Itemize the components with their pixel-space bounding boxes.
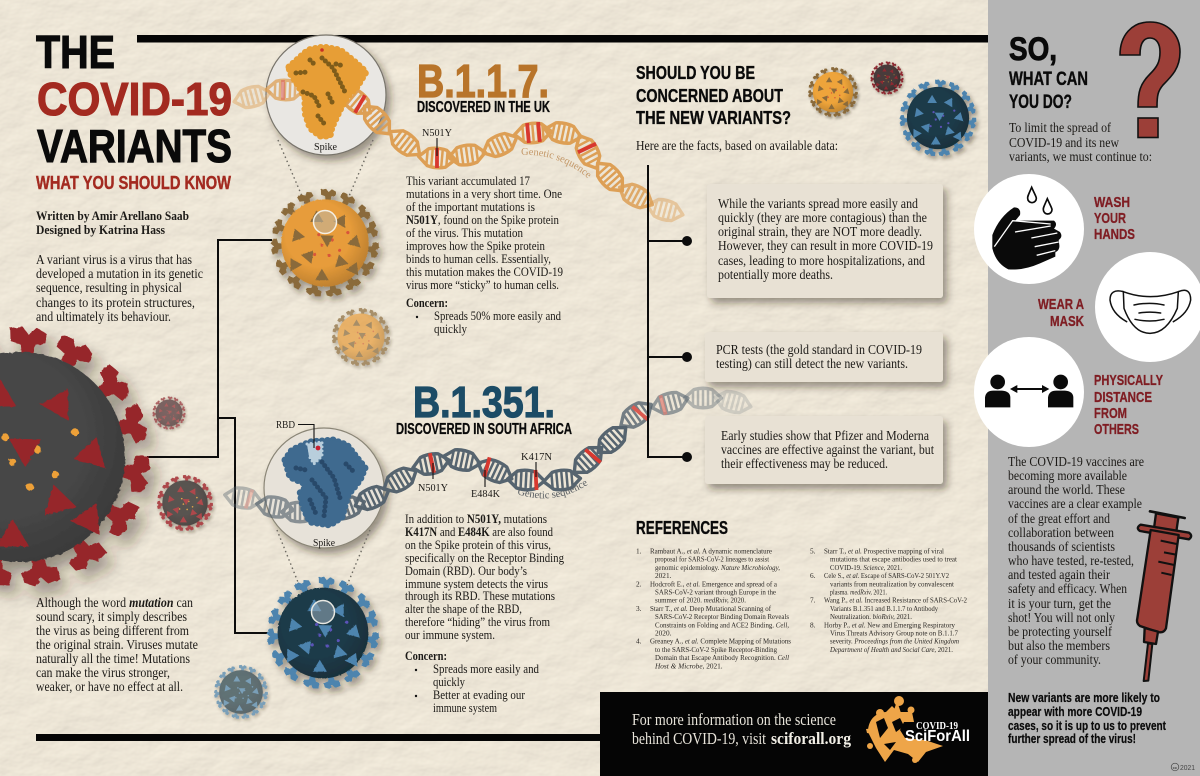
top rule [137, 35, 988, 42]
mutation labels: E484K [471, 488, 500, 500]
references: left column: 2020. [655, 628, 672, 638]
panel intro: COVID-19 and its new [1009, 135, 1119, 150]
intro text: A variant virus is a virus that has [36, 252, 192, 267]
references heading: REFERENCES [636, 518, 728, 538]
mutation labels: K417N [521, 451, 552, 463]
mutation text: the virus as being different from [36, 623, 189, 638]
N501Y marker [422, 127, 452, 156]
references: right column: 6. [810, 571, 816, 580]
intro text [36, 252, 203, 324]
intro text: developed a mutation in its genetic [36, 266, 203, 281]
B.1.351 description: Domain (RBD). Our body’s [405, 564, 527, 578]
label: spike: Spike [314, 141, 337, 153]
B.1.1.7 description: this mutation makes the COVID-19 [406, 265, 563, 279]
footer banner: For more information on the science [632, 710, 836, 729]
B.1.1.7 description: of the virus. This mutation [406, 226, 524, 240]
references: right column [810, 546, 967, 654]
genetic sequence: B.1.351 [223, 388, 753, 523]
facts intro: Here are the facts, based on available data: [636, 138, 838, 153]
references: left column: Greaney A., et al. Complete Mapping of Mutations [650, 637, 791, 646]
closing call to action: appear with more COVID-19 [1008, 705, 1142, 719]
authors: Written by Amir Arellano Saab [36, 208, 189, 223]
vaccine text: collaboration between [1008, 525, 1114, 540]
B.1.351 heading: B.1.351. [413, 378, 555, 427]
spike close-up circle: B.1.1.7 [266, 35, 386, 155]
connector lines from original virus to variants [147, 240, 272, 633]
vaccine text: shot! You will not only [1008, 610, 1115, 625]
fact card 1: cases, leading to more hospitalizations, and [718, 253, 925, 268]
vaccine text: and tested again their [1008, 567, 1110, 582]
vaccine text: around the world. These [1008, 482, 1125, 497]
SciForAll logo: COVID-19 [916, 721, 958, 732]
B.1.351 description: alter the shape of the RBD, [405, 602, 522, 616]
B.1.351 concern: immune system [433, 701, 497, 715]
panel intro: variants, we must continue to: [1009, 149, 1152, 164]
label: spike: Spike [313, 537, 335, 549]
SciForAll logo: SciForAll [905, 728, 970, 745]
label: physically distance: FROM [1094, 406, 1127, 422]
closing call to action: New variants are more likely to [1008, 691, 1160, 705]
label: physically distance: DISTANCE [1094, 390, 1152, 406]
panel intro: To limit the spread of [1009, 120, 1111, 135]
copyright: cc [1173, 765, 1178, 770]
vaccine text: The COVID-19 vaccines are [1008, 454, 1144, 469]
authors [36, 208, 189, 237]
vaccine text: vaccines are a clear example [1008, 496, 1142, 511]
references: left column: SARS-CoV-2 variant through Europe in the [655, 588, 776, 596]
references: left column: Rambaut A., et al. A dynamic nomenclature [650, 546, 772, 556]
fact card 1: However, they can result in more COVID-19 [718, 238, 933, 253]
B.1.351 description: In addition to N501Y, mutations [405, 512, 547, 526]
B.1.351 description: K417N and E484K are also found [405, 525, 553, 539]
references: right column: Variants B.1.351 and B.1.1.7 to Antibody [830, 604, 938, 613]
subtitle: WHAT YOU SHOULD KNOW [36, 173, 231, 193]
references: right column: plasma. medRxiv, 2021. [830, 588, 887, 596]
virus: blue B.1.351 [266, 576, 380, 690]
references: left column: SARS-CoV-2 Receptor Binding Domain Reveals [655, 612, 789, 621]
virus trio [808, 61, 977, 157]
references: right column: 8. [810, 620, 816, 629]
N501Y marker: N501Y [422, 127, 452, 139]
mutation text [36, 595, 198, 694]
label: wash hands: WASH [1094, 195, 1130, 211]
closing call to action: cases, so it is up to us to prevent [1008, 719, 1167, 733]
references: left column: proposal for SARS-CoV-2 lineages to assist [655, 555, 769, 564]
fact card 1: original strain, they are NOT more deadly. [718, 224, 922, 239]
references: left column: 1. [636, 546, 642, 556]
panel heading [1009, 31, 1088, 113]
references: left column: to the SARS-CoV-2 Spike Receptor-Binding [655, 645, 777, 654]
genetic sequence: B.1.1.7 [232, 80, 685, 224]
references: left column: 4. [636, 637, 642, 646]
mutation text: naturally all the time! Mutations [36, 651, 190, 666]
title: THE [36, 26, 115, 78]
B.1.1.7 concern: Spreads 50% more easily and [434, 309, 562, 323]
spike protein: B.1.351 [285, 440, 365, 525]
label: wear a mask: WEAR A [1038, 297, 1084, 313]
label: genetic sequence: Genetic sequence [522, 148, 590, 178]
fact card 2: PCR tests (the gold standard in COVID-19 [716, 342, 922, 357]
icon: question mark [1120, 22, 1180, 138]
B.1.351 description: on the Spike protein of this virus, [405, 538, 551, 552]
vaccine text: be protecting yourself [1008, 624, 1112, 639]
vaccine text: it is your turn, get the [1008, 596, 1111, 611]
spike protein: B.1.1.7 [289, 47, 366, 136]
references: left column: Constraints on Folding and ACE2 Binding. Cell, [655, 620, 789, 629]
fact card 1: quickly (they are more contagious) than the [718, 210, 927, 225]
B.1.1.7 heading: B.1.1.7. [417, 55, 549, 107]
mutation labels: N501Y [418, 482, 448, 494]
copyright: 2021 [1180, 763, 1195, 772]
vaccine text: of your community. [1008, 652, 1101, 667]
B.1.351 description: through its RBD. These mutations [405, 589, 555, 603]
icon: syringe [1137, 511, 1191, 681]
B.1.1.7 description: binds to human cells. Essentially, [406, 252, 551, 266]
label: physically distance [1094, 373, 1163, 438]
vaccine text: thousands of scientists [1008, 539, 1115, 554]
references: right column: COVID-19. Science, 2021. [830, 563, 902, 572]
vaccine text: but also the members [1008, 638, 1110, 653]
references: right column: variants from neutralization by convalescent [830, 579, 954, 588]
RBD label: RBD [276, 419, 295, 431]
B.1.351 description: our immune system. [405, 628, 495, 642]
copyright [1171, 763, 1195, 772]
B.1.351 description [405, 512, 565, 642]
title: VARIANTS [37, 120, 232, 172]
references: left column: 3. [636, 604, 642, 613]
concern heading [636, 62, 791, 128]
fact card 3: vaccines are effective against the variant, but [721, 442, 934, 457]
B.1.1.7 description: virus more “sticky” to human cells. [406, 278, 559, 292]
small virus: orange faded [332, 308, 390, 366]
highlight ring [314, 210, 336, 234]
spike close-up circle: B.1.351 [264, 428, 384, 548]
fact card 1: While the variants spread more easily and [718, 196, 918, 211]
icon: washing hands [974, 174, 1084, 284]
authors: Designed by Katrina Hass [36, 222, 165, 237]
references: right column: severity. Proceedings from the United Kingdom [830, 637, 959, 646]
label: wash hands: HANDS [1094, 227, 1135, 243]
concern heading: THE NEW VARIANTS? [636, 107, 791, 128]
B.1.351 description: therefore “hiding” the virus from [405, 615, 550, 629]
title: COVID-19 [37, 73, 232, 125]
dotted zoom lines: B.1.351 [277, 530, 370, 612]
vaccine text: of the great effort and [1008, 511, 1110, 526]
B.1.1.7 heading: DISCOVERED IN THE UK [417, 99, 551, 116]
references: left column [636, 546, 791, 670]
B.1.1.7 description: of the important mutations is [406, 200, 535, 214]
small virus: red faded [152, 396, 186, 430]
closing call to action [1008, 691, 1167, 746]
icon: face mask [1095, 252, 1200, 362]
mutation text: weaker, or have no effect at all. [36, 679, 183, 694]
vaccine text [1008, 454, 1144, 667]
B.1.1.7 concern: quickly [434, 322, 468, 336]
B.1.351 concern: Concern: [405, 649, 447, 663]
references: right column: Virus Threats Advisory Group note on B.1.1.7 [830, 628, 958, 638]
B.1.1.7 concern [406, 296, 562, 336]
vaccine text: becoming more available [1008, 468, 1127, 483]
original virus [0, 326, 151, 588]
references: right column: Department of Health and Social Care, 2021. [829, 645, 953, 654]
fact card 1: potentially more deaths. [718, 267, 833, 282]
footer banner [600, 692, 988, 776]
mutation text: the original strain. Viruses mutate [36, 637, 198, 652]
references: left column: 2021. [655, 571, 672, 580]
references: right column: Neutralization. bioRxiv, 2021. [830, 612, 912, 621]
references: right column: Wang P., et al. Increased Resistance of SARS-CoV-2 [824, 596, 967, 605]
references: left column: 2. [636, 579, 642, 588]
B.1.351 concern: Spreads more easily and [433, 662, 540, 676]
intro text: sequence, resulting in physical [36, 280, 182, 295]
B.1.1.7 description: N501Y, found on the Spike protein [406, 213, 559, 227]
references: left column: summer of 2020. medRxiv, 2020. [655, 596, 746, 605]
title [36, 26, 232, 172]
mutation text: Although the word mutation can [36, 595, 193, 610]
references: right column: 5. [810, 546, 816, 556]
fact card 3: their effectiveness may be reduced. [721, 456, 888, 471]
references: left column: Starr T., et al. Deep Mutational Scanning of [650, 604, 772, 613]
footer banner: sciforall.org [771, 729, 851, 748]
references: left column: Host & Microbe, 2021. [654, 661, 723, 670]
vaccine text: safety and efficacy. When [1008, 581, 1127, 596]
fact card 1 [707, 184, 943, 298]
references: left column: genomic epidemiology. Nature Microbiology, [655, 563, 780, 572]
intro text: changes to its protein structures, [36, 295, 195, 310]
B.1.1.7 description: improves how the Spike protein [406, 239, 546, 253]
panel: what can you do [988, 0, 1200, 776]
mutation labels [418, 451, 552, 500]
footer banner: behind COVID-19, visit [632, 729, 766, 748]
small virus: blue faded [214, 665, 268, 719]
references: right column: Cele S., et al. Escape of SARS-CoV-2 501Y.V2 [824, 571, 949, 580]
icon: physical distance [974, 337, 1084, 447]
label: wear a mask: MASK [1050, 314, 1084, 330]
intro text: and ultimately its behaviour. [36, 309, 171, 324]
dotted zoom lines: B.1.1.7 [278, 140, 373, 222]
B.1.351 description: specifically on the Receptor Binding [405, 551, 565, 565]
concern heading: CONCERNED ABOUT [636, 85, 784, 106]
label: wash hands: YOUR [1094, 211, 1126, 227]
fact card 2 [705, 332, 943, 382]
SciForAll logo [866, 696, 970, 763]
references: right column: mutations that escape antibodies used to treat [830, 555, 957, 564]
B.1.351 concern: quickly [433, 675, 465, 689]
mutation text: sound scary, it simply describes [36, 609, 187, 624]
B.1.351 heading: DISCOVERED IN SOUTH AFRICA [396, 421, 572, 438]
fact card 3 [705, 416, 943, 484]
label: wear a mask [1038, 297, 1084, 330]
RBD label [276, 419, 314, 448]
mutation text: can make the virus stronger, [36, 665, 170, 680]
panel intro [1009, 120, 1152, 164]
B.1.1.7 concern: Concern: [406, 296, 448, 310]
panel heading: YOU DO? [1009, 92, 1072, 113]
vaccine text: who have tested, re-tested, [1008, 553, 1134, 568]
highlight ring [312, 600, 334, 624]
references: left column: Domain that Escape Antibody Recognition. Cell [655, 653, 789, 662]
panel heading: SO, [1009, 31, 1057, 67]
bottom rule [36, 734, 600, 741]
references: right column: Starr T., et al. Prospective mapping of viral [824, 546, 944, 556]
timeline [648, 165, 692, 462]
virus: orange B.1.1.7 [271, 189, 380, 298]
B.1.1.7 description: mutations in a very short time. One [406, 187, 562, 201]
concern heading: SHOULD YOU BE [636, 62, 755, 83]
references: right column: 7. [810, 596, 816, 605]
references: right column: Horby P., et al. New and Emerging Respiratory [824, 620, 955, 629]
small virus: red [157, 475, 213, 531]
label: wash hands [1094, 195, 1135, 243]
label: genetic sequence: Genetic sequence [518, 481, 588, 498]
closing call to action: further spread of the virus! [1008, 732, 1136, 746]
panel heading: WHAT CAN [1009, 69, 1088, 90]
fact card 2: testing) can still detect the new variants. [716, 356, 908, 371]
B.1.351 description: immune system detects the virus [405, 577, 548, 591]
label: physically distance: PHYSICALLY [1094, 373, 1163, 389]
B.1.351 concern: Better at evading our [433, 688, 526, 702]
fact card 3: Early studies show that Pfizer and Moderna [721, 428, 929, 443]
references: left column: Hodcroft E., et al. Emergence and spread of a [650, 579, 778, 588]
B.1.1.7 description [406, 174, 563, 292]
B.1.1.7 description: This variant accumulated 17 [406, 174, 531, 188]
B.1.351 concern [405, 649, 540, 715]
label: physically distance: OTHERS [1094, 422, 1139, 438]
